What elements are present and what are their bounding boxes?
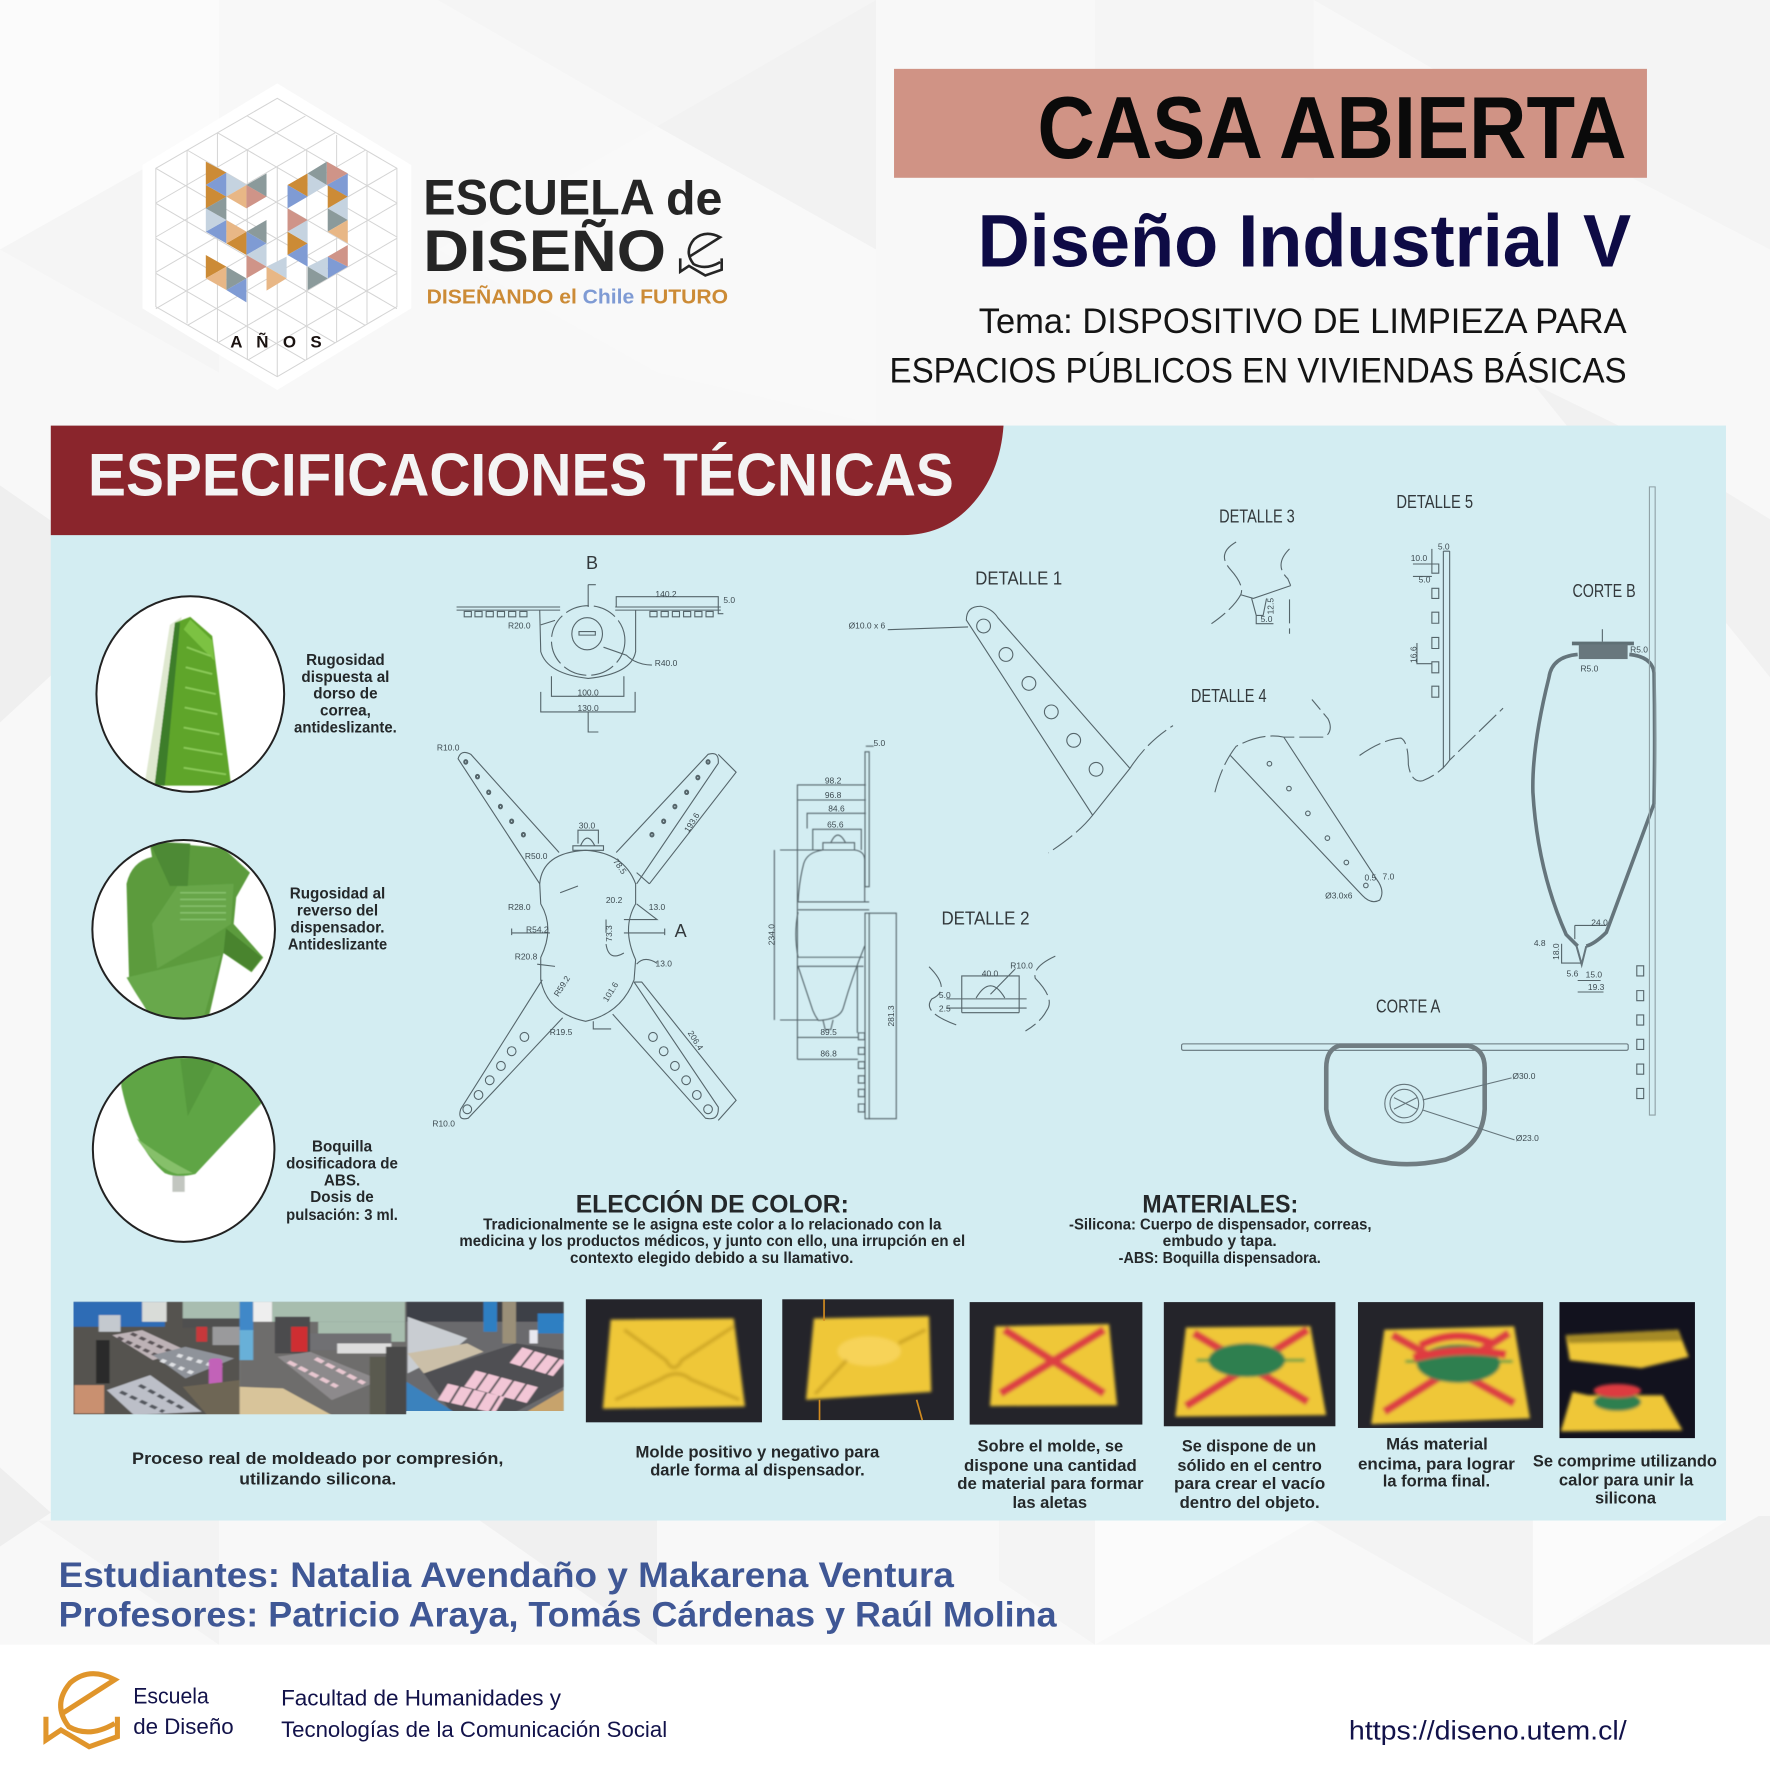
caption: compression with heat: calor para unir la [1559, 1472, 1694, 1490]
caption: material on mold: dispone una cantidad [964, 1457, 1137, 1475]
caption: nozzle: pulsación: 3 ml. [286, 1207, 398, 1224]
footer: faculty name: Tecnologías de la Comunicación Social [281, 1717, 667, 1742]
technical drawing: detalle 1 [888, 606, 1173, 853]
technical drawing: detalle 4 [1215, 699, 1382, 902]
caption: central solid: dentro del objeto. [1180, 1494, 1320, 1512]
drawing dimensions: 24.0 [1591, 918, 1608, 928]
caption: strap roughness: dispuesta al [301, 669, 389, 686]
drawing dimensions: R54.2 [526, 924, 549, 934]
title band: CASA ABIERTA [1037, 78, 1627, 177]
subtitle: Diseño Industrial V [978, 199, 1631, 282]
drawing dimensions: R10.0 [432, 1119, 455, 1129]
section: color choice [459, 1190, 965, 1267]
drawing dimensions: 193.6 [682, 811, 702, 834]
drawing dimensions: 4.8 [1534, 938, 1546, 948]
caption: mold: darle forma al dispensador. [650, 1461, 865, 1479]
caption: reverse roughness [288, 886, 387, 953]
circle detail: strap roughness [96, 596, 284, 792]
drawing dimensions: 12.5 [1265, 598, 1275, 614]
photo: negative mold [782, 1299, 954, 1420]
logo: escuela de diseño wordmark: DISEÑANDO el Chile FUTURO [427, 286, 728, 309]
drawing dimensions: 5.0 [939, 990, 951, 1000]
section: materials: -Silicona: Cuerpo de dispensador, correas, [1069, 1216, 1372, 1233]
drawing dimensions: 40.0 [982, 968, 999, 978]
footer: faculty name: Facultad de Humanidades y [281, 1686, 562, 1711]
drawing dimensions: 18.0 [1551, 943, 1561, 960]
drawing dimensions: 65.6 [827, 819, 844, 829]
title band [894, 69, 1647, 178]
drawing dimensions: R5.0 [1630, 644, 1648, 654]
drawing dimensions: 13.0 [649, 902, 666, 912]
drawing dimensions: 78.5 [611, 857, 629, 876]
drawing dimensions: 281.3 [886, 1005, 896, 1027]
drawing dimensions: Ø10.0 x 6 [849, 621, 886, 631]
drawing dimensions: 5.0 [873, 738, 886, 748]
caption: more material: encima, para lograr [1358, 1456, 1516, 1474]
icon: escuela de diseño logo [46, 1674, 117, 1747]
drawing dimensions: 5.0 [1261, 614, 1273, 624]
caption: reverse roughness: reverso del [297, 902, 378, 919]
drawing dimensions: 5.0 [723, 595, 735, 605]
caption: strap roughness: dorso de [313, 686, 378, 703]
photo: central solid [1164, 1302, 1335, 1426]
caption: reverse roughness: Rugosidad al [290, 886, 385, 903]
section: materials: -ABS: Boquilla dispensadora. [1119, 1250, 1321, 1267]
caption: compression with heat: silicona [1595, 1490, 1657, 1508]
caption: strap roughness [294, 652, 397, 737]
drawing dimensions: 10.0 [1411, 553, 1427, 563]
caption: central solid [1174, 1438, 1325, 1512]
circle detail: nozzle [93, 1057, 274, 1242]
drawing dimensions: 98.2 [825, 775, 842, 785]
drawing labels: CORTE B [1572, 581, 1636, 601]
footer: school name [133, 1683, 234, 1739]
caption: material on mold: las aletas [1013, 1494, 1087, 1512]
caption: compression with heat: Se comprime utilizando [1533, 1452, 1717, 1470]
drawing dimensions: 16.6 [1409, 646, 1419, 663]
credits: Estudiantes: Natalia Avendaño y Makarena Ventura [59, 1556, 954, 1595]
technical drawing: side view [774, 746, 896, 1119]
drawing labels: DETALLE 1 [975, 569, 1062, 589]
caption: strap roughness: Rugosidad [306, 652, 385, 669]
drawing labels: DETALLE 5 [1396, 492, 1473, 512]
caption: compression with heat [1533, 1452, 1717, 1508]
footer: website: https://diseno.utem.cl/ [1349, 1715, 1627, 1746]
drawing dimensions: 0.5 [1365, 872, 1377, 882]
technical drawing: top view B [457, 585, 723, 732]
technical drawing: detalle 3 [1211, 542, 1291, 634]
photo: more material [1358, 1302, 1543, 1428]
drawing dimensions: 130.0 [578, 703, 599, 713]
caption: mold: Molde positivo y negativo para [636, 1443, 880, 1461]
caption: strap roughness: correa, [320, 703, 371, 720]
caption: more material: Más material [1386, 1435, 1488, 1453]
section: color choice: medicina y los productos médicos, y junto con ello, una irrupción en el [459, 1233, 965, 1250]
drawing dimensions: 2.5 [939, 1003, 951, 1013]
drawing dimensions: 5.6 [1567, 968, 1579, 978]
technical drawing: front view with straps [458, 752, 736, 1120]
heading banner: ESPECIFICACIONES TÉCNICAS [88, 442, 954, 509]
caption: molding process: Proceso real de moldeado por compresión, [132, 1450, 503, 1468]
caption: material on mold: Sobre el molde, se [978, 1438, 1123, 1456]
caption: nozzle: Boquilla [312, 1138, 373, 1155]
drawing dimensions: R10.0 [437, 743, 460, 753]
heading banner [51, 426, 1004, 535]
drawing labels: DETALLE 4 [1191, 686, 1267, 706]
drawing dimensions: 84.6 [828, 804, 845, 814]
drawing dimensions: R20.0 [508, 621, 531, 631]
drawing dimensions: 96.8 [825, 790, 842, 800]
drawing dimensions: 5.0 [1438, 542, 1450, 552]
logo: escuela de diseño wordmark: DISEÑO [423, 218, 666, 284]
photo: material on mold [970, 1302, 1142, 1425]
drawing dimensions: 7.0 [1383, 871, 1395, 881]
drawing dimensions [432, 542, 1648, 1143]
credits [59, 1556, 1057, 1635]
footer: school name: de Diseño [133, 1714, 234, 1739]
drawing dimensions: 73.3 [604, 925, 614, 942]
drawing dimensions: 19.3 [1588, 982, 1605, 992]
section: materials [1069, 1191, 1372, 1267]
drawing labels: A [675, 921, 687, 941]
technical drawing: corte B [1533, 487, 1655, 1115]
drawing dimensions: R5.0 [1580, 664, 1599, 674]
drawing dimensions: R40.0 [655, 658, 678, 668]
drawing dimensions: R19.5 [550, 1027, 573, 1037]
caption: nozzle: ABS. [324, 1172, 360, 1189]
caption: central solid: sólido en el centro [1177, 1457, 1322, 1475]
caption: more material [1358, 1435, 1516, 1491]
logo: 50 años hexagon [142, 83, 411, 390]
logo: escuela de diseño wordmark [423, 169, 728, 309]
drawing dimensions: R10.0 [1010, 961, 1033, 971]
caption: central solid: Se dispone de un [1182, 1438, 1316, 1456]
drawing labels [586, 492, 1636, 1017]
technical drawing: detalle 5 [1360, 549, 1503, 781]
photo: positive mold [586, 1299, 762, 1422]
section: materials: MATERIALES: [1142, 1191, 1298, 1218]
caption: material on mold: de material para formar [957, 1475, 1144, 1493]
caption: reverse roughness: Antideslizante [288, 936, 387, 953]
caption: strap roughness: antideslizante. [294, 720, 397, 737]
drawing dimensions: 86.8 [820, 1049, 837, 1059]
logo: escuela de diseño wordmark: ESCUELA [423, 169, 655, 225]
caption: molding process: utilizando silicona. [239, 1470, 396, 1488]
drawing dimensions: 140.2 [655, 589, 677, 599]
drawing dimensions: R59.2 [552, 974, 572, 998]
drawing labels: CORTE A [1376, 997, 1440, 1017]
theme text: ESPACIOS PÚBLICOS EN VIVIENDAS BÁSICAS [890, 352, 1627, 391]
technical drawing: detalle 2 [929, 956, 1055, 1031]
drawing labels: DETALLE 3 [1219, 507, 1295, 527]
caption: nozzle [286, 1138, 398, 1224]
drawing labels: DETALLE 2 [941, 909, 1029, 929]
theme text: Tema: DISPOSITIVO DE LIMPIEZA PARA [979, 302, 1627, 341]
technical drawing: corte A [1182, 1044, 1628, 1164]
section: color choice: ELECCIÓN DE COLOR: [576, 1190, 849, 1218]
photos: compression molding process [73, 1302, 564, 1417]
drawing dimensions: 13.0 [656, 958, 672, 968]
caption: reverse roughness: dispensador. [291, 919, 384, 936]
drawing dimensions: R50.0 [525, 851, 548, 861]
drawing dimensions: 100.0 [578, 687, 599, 697]
drawing dimensions: Ø3.0x6 [1325, 891, 1353, 901]
footer: school name: Escuela [133, 1683, 209, 1708]
drawing dimensions: 234.0 [766, 924, 776, 945]
footer: faculty name [281, 1686, 667, 1742]
section: color choice: Tradicionalmente se le asigna este color a lo relacionado con la [483, 1216, 942, 1233]
caption: central solid: para crear el vacío [1174, 1475, 1325, 1493]
caption: molding process [132, 1450, 503, 1488]
drawing dimensions: 89.5 [820, 1027, 837, 1037]
drawing dimensions: R28.0 [508, 902, 531, 912]
section: color choice: contexto elegido debido a su llamativo. [570, 1250, 853, 1267]
section: materials: embudo y tapa. [1163, 1233, 1277, 1250]
caption: more material: la forma final. [1383, 1473, 1490, 1491]
caption: nozzle: dosificadora de [286, 1155, 398, 1172]
caption: nozzle: Dosis de [310, 1189, 374, 1206]
drawing dimensions: 5.0 [1419, 574, 1431, 584]
drawing dimensions: 206.4 [686, 1029, 706, 1052]
caption: mold [636, 1443, 880, 1479]
drawing labels: B [586, 553, 598, 573]
photo: compression with heat [1559, 1302, 1695, 1438]
theme text [890, 302, 1627, 391]
logo: escuela de diseño wordmark: de [666, 172, 722, 225]
caption: material on mold [957, 1438, 1144, 1512]
drawing dimensions: Ø30.0 [1512, 1071, 1536, 1081]
drawing dimensions: R20.8 [515, 952, 538, 962]
panel: especificaciones técnicas [51, 426, 1726, 1521]
logo: años label: A Ñ O S [230, 332, 322, 352]
drawing dimensions: 30.0 [579, 821, 596, 831]
drawing dimensions: 101.6 [601, 980, 620, 1003]
drawing dimensions: 20.2 [606, 895, 623, 905]
drawing dimensions: Ø23.0 [1516, 1133, 1539, 1143]
drawing dimensions: 15.0 [1586, 970, 1602, 980]
credits: Profesores: Patricio Araya, Tomás Cárdenas y Raúl Molina [59, 1596, 1057, 1635]
circle detail: reverse roughness [92, 840, 275, 1020]
